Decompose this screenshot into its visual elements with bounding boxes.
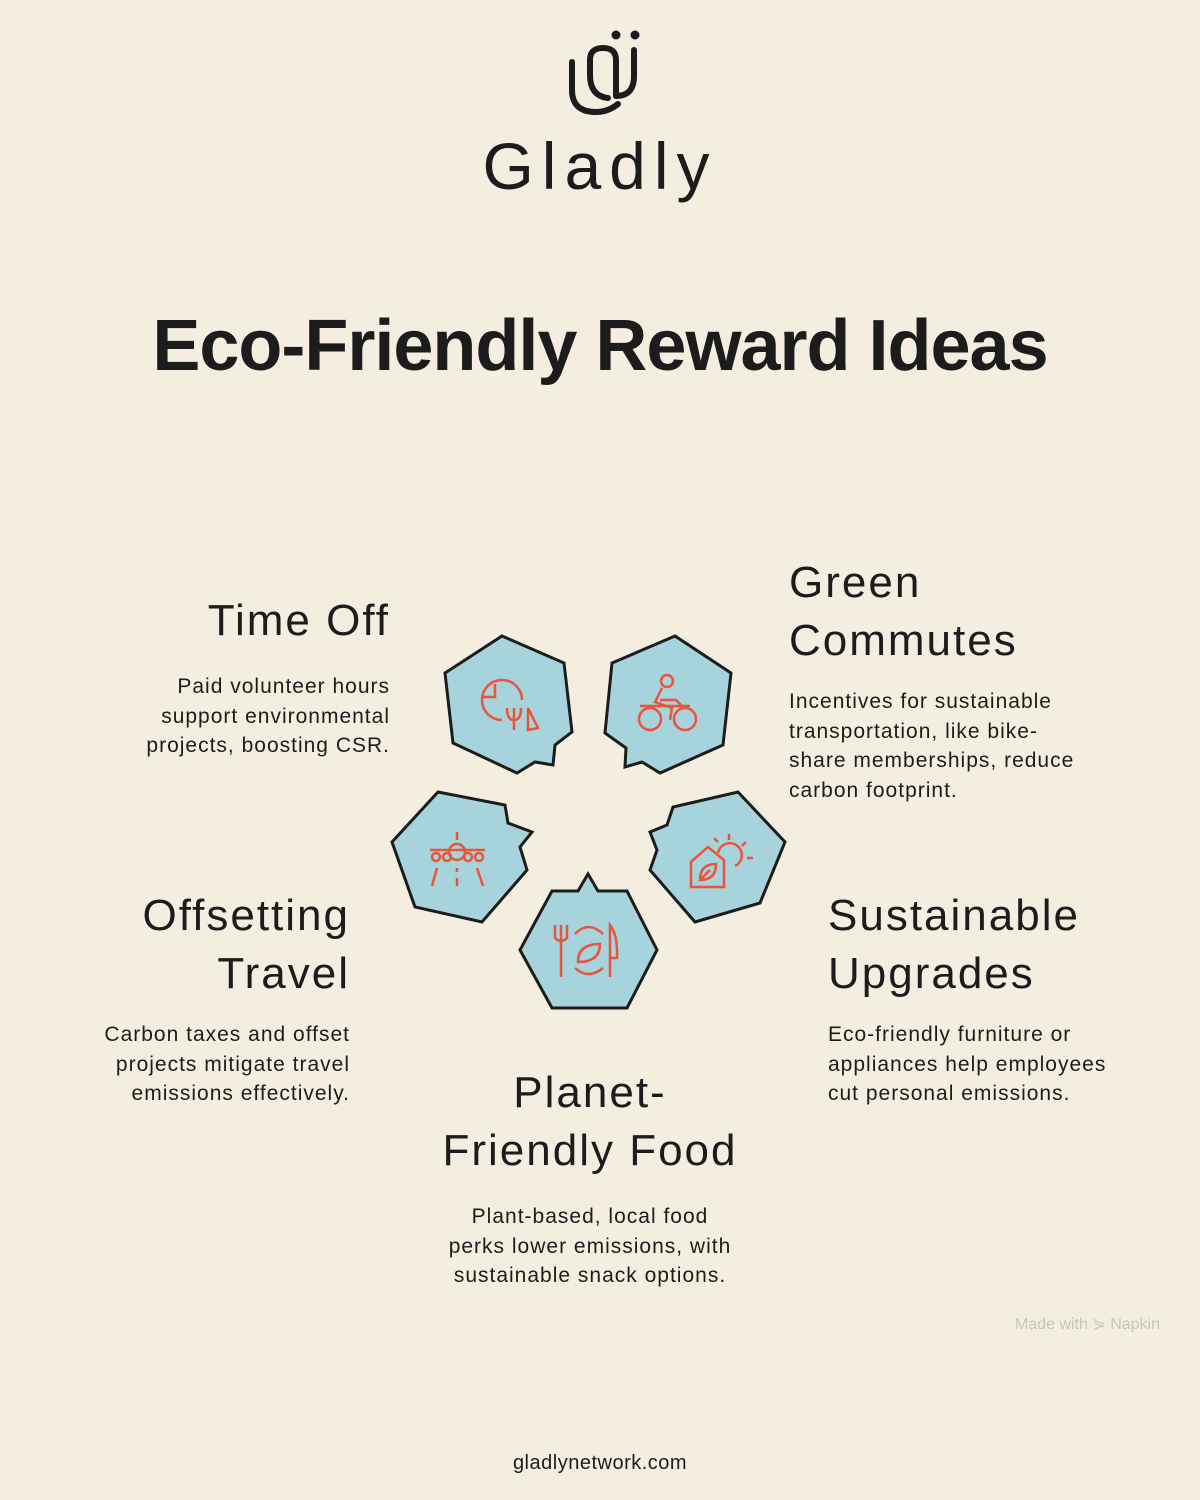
text: sustainable upgrades: Eco-friendly furniture or: [828, 1023, 1071, 1046]
heading: planet-friendly food: Planet-: [513, 1068, 667, 1117]
text: green commutes: [789, 690, 1074, 802]
hexagon: offsetting travel: [392, 792, 532, 922]
hexagon: planet-friendly food: [520, 874, 657, 1008]
text: sustainable upgrades: appliances help employees: [828, 1052, 1106, 1076]
heading: planet-friendly food: [442, 1068, 738, 1175]
text: time off: [146, 675, 390, 757]
text: offsetting travel: [104, 1023, 350, 1105]
text: planet-friendly food: sustainable snack options.: [454, 1264, 726, 1287]
text: time off: Paid volunteer hours: [177, 675, 390, 698]
text: green commutes: share memberships, reduce: [789, 749, 1074, 772]
heading: offsetting travel: Travel: [217, 949, 350, 998]
hexagon: time off: [445, 636, 572, 773]
footer url: gladlynetwork.com: [513, 1452, 687, 1474]
text: green commutes: transportation, like bike-: [789, 720, 1038, 742]
brand name: Gladly: [482, 129, 718, 203]
icon: Gladly logo: [569, 30, 640, 115]
text: planet-friendly food: [449, 1205, 731, 1287]
heading: sustainable upgrades: Sustainable: [828, 891, 1080, 940]
heading: sustainable upgrades: Upgrades: [828, 949, 1035, 998]
text: time off: projects, boosting CSR.: [146, 734, 390, 757]
text: sustainable upgrades: cut personal emissions.: [828, 1082, 1070, 1105]
heading: green commutes: [789, 558, 1018, 665]
heading: offsetting travel: [142, 891, 350, 998]
heading: offsetting travel: Offsetting: [142, 891, 350, 940]
heading: planet-friendly food: Friendly Food: [442, 1126, 738, 1175]
text: planet-friendly food: perks lower emissions, with: [449, 1234, 731, 1258]
text: green commutes: Incentives for sustainable: [789, 690, 1052, 713]
hexagon: green commutes: [605, 636, 731, 773]
heading: green commutes: Green: [789, 558, 921, 607]
diagram: hexagons: [390, 634, 787, 1010]
text: offsetting travel: emissions effectively.: [132, 1082, 350, 1105]
heading: time off: Time Off: [208, 596, 390, 645]
text: time off: support environmental: [161, 704, 390, 728]
text: sustainable upgrades: [828, 1023, 1106, 1105]
text: planet-friendly food: Plant-based, local food: [472, 1205, 708, 1228]
heading: green commutes: Commutes: [789, 616, 1018, 665]
title: Eco-Friendly Reward Ideas: [152, 306, 1048, 386]
heading: sustainable upgrades: [828, 891, 1080, 998]
text: offsetting travel: projects mitigate travel: [116, 1052, 350, 1076]
text: offsetting travel: Carbon taxes and offset: [104, 1023, 350, 1046]
watermark: Made with ⋟ Napkin: [1015, 1316, 1160, 1333]
text: green commutes: carbon footprint.: [789, 778, 958, 802]
hexagon: sustainable upgrades: [650, 792, 785, 922]
